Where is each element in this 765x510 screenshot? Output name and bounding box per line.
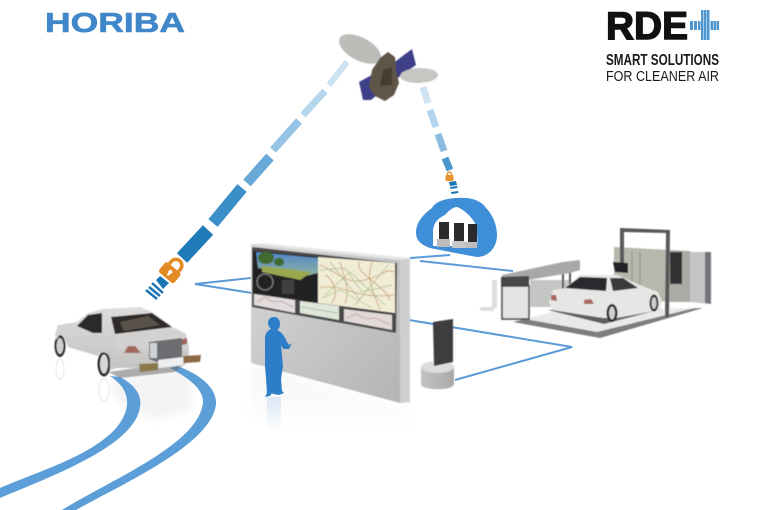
floor link lines xyxy=(195,255,572,380)
dish: left xyxy=(334,28,386,70)
car wheel reflections xyxy=(56,359,109,401)
test cell xyxy=(480,228,711,338)
wheels xyxy=(54,335,66,357)
gantry frame xyxy=(620,228,670,317)
tail light xyxy=(124,346,141,353)
duct xyxy=(480,260,580,319)
icon: orange lock on car link xyxy=(158,254,187,284)
data link: satellite to cloud xyxy=(423,87,458,194)
stripes by car xyxy=(146,276,169,299)
icon: small lock xyxy=(446,172,454,181)
icon: striped plus xyxy=(690,10,719,40)
person reflection xyxy=(267,397,281,433)
body xyxy=(369,52,399,101)
logo: RDE+ smart solutions xyxy=(606,5,719,85)
solar panels xyxy=(359,49,416,100)
logo: HORIBA: HORIBA xyxy=(45,7,185,38)
screen xyxy=(252,247,397,333)
logo: RDE+ smart solutions: FOR CLEANER AIR xyxy=(606,68,719,85)
video wall xyxy=(251,243,410,403)
cabinets xyxy=(614,247,711,304)
rear measurement box xyxy=(149,338,182,362)
monitor xyxy=(613,262,628,273)
screen: charts xyxy=(254,294,392,330)
data link: car to satellite xyxy=(146,62,347,299)
test car xyxy=(549,275,662,322)
logo: RDE+ smart solutions: RDE xyxy=(606,5,688,48)
servers xyxy=(437,222,477,248)
car body xyxy=(55,307,189,370)
RDE car xyxy=(54,307,201,378)
bumper xyxy=(139,363,158,372)
satellite xyxy=(334,28,438,101)
cloud with servers xyxy=(416,198,497,257)
road: driving track xyxy=(0,366,216,510)
kiosk xyxy=(421,319,454,389)
screen: map xyxy=(318,257,395,313)
person silhouette xyxy=(265,317,292,397)
screen: cockpit view xyxy=(253,251,318,303)
dish: right xyxy=(400,67,438,84)
car floor reflection xyxy=(110,368,192,420)
windows xyxy=(77,313,102,333)
tagline: SMART SOLUTIONS xyxy=(606,52,719,69)
floor reflection: wall xyxy=(251,365,410,435)
floor platform xyxy=(513,308,703,338)
